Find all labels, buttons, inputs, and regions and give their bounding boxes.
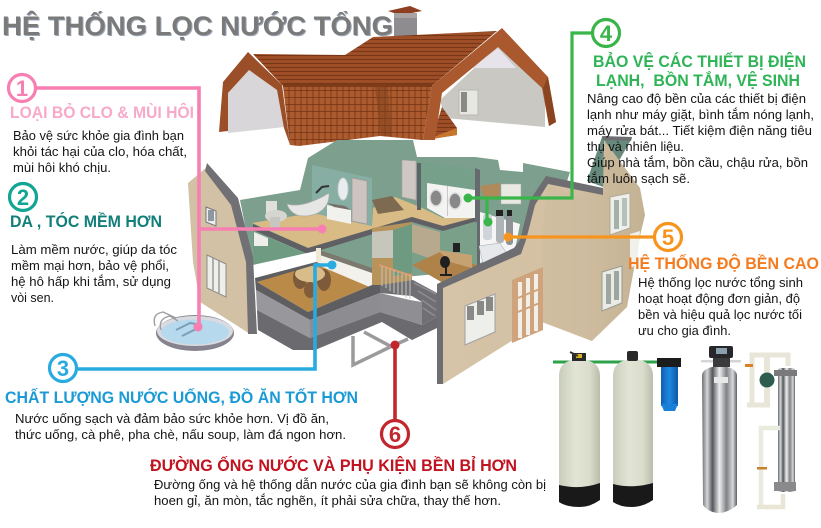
second floor timber xyxy=(252,197,478,248)
illustration: house cutaway body xyxy=(240,140,570,365)
text block 4: LẠNH, BỒN TẮM, VỆ SINH xyxy=(596,71,800,90)
dining table and chairs xyxy=(293,266,331,298)
text block 5: ưu cho gia đình. xyxy=(638,323,731,338)
water pipes xyxy=(353,332,408,365)
lower right window xyxy=(602,266,622,311)
illustration: detached house roof xyxy=(219,6,556,146)
stair opening xyxy=(372,196,404,214)
divider wall xyxy=(417,163,421,210)
plinth xyxy=(257,310,437,350)
number badge 6 xyxy=(382,420,408,448)
white gap behind dining room xyxy=(253,251,316,278)
text block 3: Nước uống sạch và đảm bảo sức khỏe hơn. Vị đồ ăn, xyxy=(15,411,329,426)
title: HỆ THỐNG LỌC NƯỚC TỔNG xyxy=(3,10,394,42)
callout line 1: pink xyxy=(36,88,326,332)
lower left window xyxy=(465,294,495,345)
stainless softener tank xyxy=(701,346,741,513)
foundation walls xyxy=(256,290,310,338)
text block 2: vòi sen. xyxy=(11,290,54,305)
text block 3 xyxy=(5,387,358,442)
text block 4: Nâng cao độ bền của các thiết bị điện xyxy=(587,91,806,106)
text block 2: DA , TÓC MỀM HƠN xyxy=(10,212,162,231)
number badge 1 xyxy=(8,74,36,102)
text block 5 xyxy=(628,253,819,338)
stair railing xyxy=(379,265,412,299)
text block 2: Làm mềm nước, giúp da tóc xyxy=(11,242,178,257)
first floor green wall xyxy=(253,231,316,265)
patio door xyxy=(512,267,543,343)
text block 1 xyxy=(10,103,194,175)
middle rooms xyxy=(372,222,412,288)
number badge 5 xyxy=(654,224,682,250)
text block 1: mùi hôi khó chịu. xyxy=(13,160,111,175)
number badge 1: 1 xyxy=(16,76,28,101)
blue cartridge filter xyxy=(657,358,681,411)
text block 1: khỏi tác hại của clo, hóa chất, xyxy=(13,144,187,159)
side doorway xyxy=(630,231,640,268)
number badge 3: 3 xyxy=(57,356,69,381)
small window xyxy=(206,207,216,226)
text block 4: máy rửa bát... Tiết kiệm điện năng tiêu xyxy=(587,123,812,138)
text block 3: thức uống, cà phê, pha chè, nấu soup, làm đá ngon hơn. xyxy=(15,427,346,442)
toilet xyxy=(265,201,287,228)
text block 5: bền và hiệu quả lọc nước tối xyxy=(638,307,802,322)
green connecting pipe xyxy=(553,360,658,364)
number badge 6: 6 xyxy=(389,422,401,447)
upper window xyxy=(610,193,630,235)
callout line 5: orange xyxy=(504,232,654,242)
text block 3: CHẤT LƯỢNG NƯỚC UỐNG, ĐỒ ĂN TỐT HƠN xyxy=(5,387,358,407)
illustration: product filter tanks xyxy=(553,346,797,513)
text block 6: hoen gỉ, ăn mòn, tắc nghẽn, ít phải sửa chữa, thay thế hơn. xyxy=(154,493,501,508)
illustration: swimming pool xyxy=(154,312,234,351)
number badge 4: 4 xyxy=(600,21,613,46)
callout line 4: green xyxy=(464,33,592,226)
grey wall between rooms xyxy=(475,168,480,268)
text block 6: ĐƯỜNG ỐNG NƯỚC VÀ PHỤ KIỆN BỀN BỈ HƠN xyxy=(150,455,517,475)
office xyxy=(412,222,477,284)
number badge 4 xyxy=(592,20,620,46)
UV housing with plastic pipes xyxy=(745,355,797,507)
text block 6 xyxy=(150,455,546,508)
small rear window xyxy=(254,232,268,246)
text block 4: BẢO VỆ CÁC THIẾT BỊ ĐIỆN xyxy=(593,52,806,71)
number badge 3 xyxy=(50,354,76,382)
title: HỆ THỐNG LỌC NƯỚC TỔNG xyxy=(2,9,393,41)
fiberglass tank left xyxy=(559,352,600,507)
number badge 2 xyxy=(10,184,36,210)
text block 1: Bảo vệ sức khỏe gia đình bạn xyxy=(13,128,184,143)
number badge 2: 2 xyxy=(17,185,29,210)
text block 4: tắm luôn sạch sẽ. xyxy=(587,171,690,186)
text block 1: LOẠI BỎ CLO & MÙI HÔI xyxy=(10,103,194,122)
kitchen counter xyxy=(316,248,372,288)
upper right window and boxes xyxy=(480,183,521,204)
washing machines xyxy=(427,183,475,218)
second floor slab xyxy=(253,217,477,254)
illustration: left wing of house xyxy=(188,163,257,334)
callout line 3: blue xyxy=(78,260,336,369)
illustration: right wing of house xyxy=(437,136,645,384)
text block 5: hoạt hoạt động đơn giản, độ xyxy=(638,291,800,306)
text block 4 xyxy=(587,52,814,186)
number badge 5: 5 xyxy=(662,225,674,250)
fiberglass tank right xyxy=(613,351,653,507)
text block 4: lạnh như máy giặt, bình tắm nóng lạnh, xyxy=(587,107,814,122)
text block 2 xyxy=(10,212,178,305)
text block 4: thụ và nhiên liệu. xyxy=(587,139,684,154)
text block 5: Hệ thống lọc nước tổng sinh xyxy=(638,275,803,290)
laundry room wall xyxy=(418,160,478,218)
stairs xyxy=(380,280,437,325)
text block 2: mềm mại hơn, bảo vệ phổi, xyxy=(11,258,169,273)
dining floor rim xyxy=(255,262,380,320)
garage with small filters xyxy=(479,210,520,264)
dining room floor xyxy=(257,262,372,312)
text block 4: Giúp nhà tắm, bồn cầu, chậu rửa, bồn xyxy=(587,155,808,170)
callout line 6: red xyxy=(390,340,400,421)
text block 6: Đường ống và hệ thống dẫn nước của gia đình bạn sẽ không còn bị xyxy=(154,477,546,492)
bathroom door xyxy=(352,178,367,224)
bathroom wall xyxy=(312,165,372,226)
text block 2: hệ hô hấp khi tắm, sử dụng xyxy=(11,274,171,289)
back walls xyxy=(240,140,570,280)
upper right rear door xyxy=(402,160,416,200)
lower window xyxy=(207,255,226,297)
bathtub xyxy=(287,186,329,216)
sink cabinet and mirror xyxy=(327,178,351,224)
